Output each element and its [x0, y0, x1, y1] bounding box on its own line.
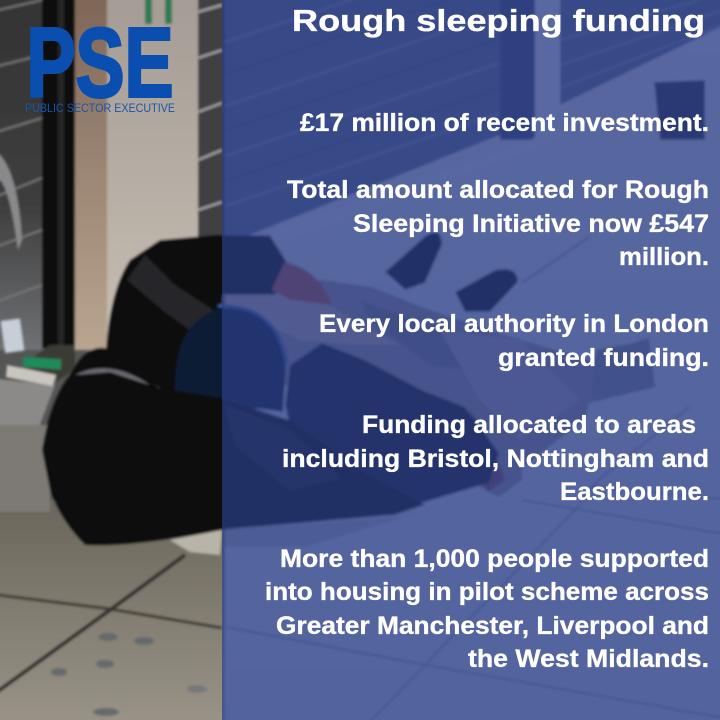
dark coat and hand: [106, 235, 332, 400]
left metal shutter: [0, 0, 42, 350]
logo letters: PSE: [26, 8, 174, 118]
black bin bag: [42, 348, 425, 545]
text block: recent investment: £17 million of recent investment.: [300, 109, 709, 137]
text block: pilot scheme: Greater Manchester, Liverpool and: [276, 612, 709, 640]
text block: pilot scheme: into housing in pilot scheme across: [265, 578, 709, 606]
text block: total allocated: million.: [619, 243, 709, 271]
blanket pile: [225, 280, 655, 497]
text block: funded areas: Funding allocated to areas: [362, 411, 696, 439]
text block: total allocated: Sleeping Initiative now £547: [353, 210, 709, 238]
text block: total allocated: [287, 176, 709, 271]
PSE logo: [25, 8, 175, 118]
translucent blue panel: [222, 0, 720, 720]
text block: funded areas: including Bristol, Nottingham and: [282, 445, 709, 473]
text block: pilot scheme: the West Midlands.: [468, 645, 709, 673]
far pillar and shutter: [225, 0, 720, 266]
concrete pillar: [75, 0, 200, 350]
text block: London authorities: Every local authority in London: [319, 310, 709, 338]
body under blanket: [285, 343, 499, 503]
blue hood: [175, 306, 287, 412]
text block: total allocated: Total amount allocated for Rough: [287, 176, 709, 204]
door frame: [42, 0, 75, 348]
text block: pilot scheme: More than 1,000 people supported: [280, 545, 709, 573]
text block: funded areas: Eastbourne.: [560, 478, 709, 506]
text block: London authorities: granted funding.: [498, 344, 709, 372]
plaid blanket and foot: [170, 500, 462, 555]
right shutter: [198, 0, 500, 245]
text block: London authorities: [319, 310, 709, 372]
text block: pilot scheme: [265, 545, 709, 673]
shoes: [385, 232, 518, 312]
text block: funded areas: [282, 411, 709, 506]
doorstep: [0, 319, 75, 512]
title: Rough sleeping funding: [292, 3, 705, 38]
logo tagline: PUBLIC SECTOR EXECUTIVE: [25, 103, 175, 115]
